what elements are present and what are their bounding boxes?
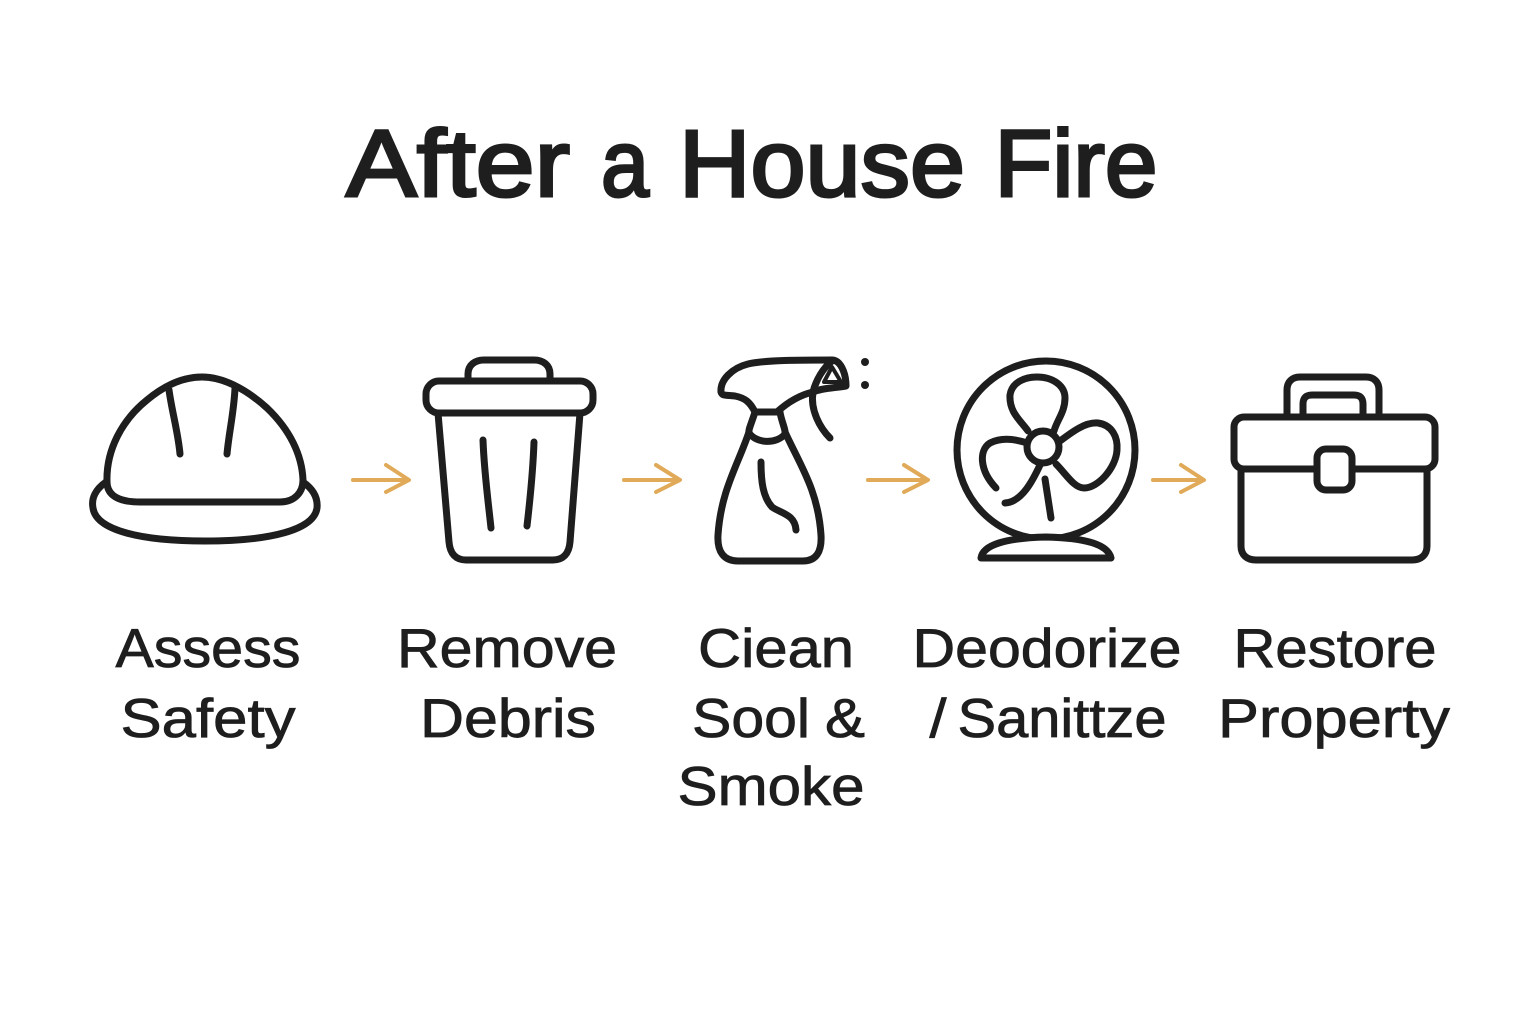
label: Restore Property bbox=[1218, 617, 1451, 749]
label: Clean Soot & Smoke: & bbox=[825, 687, 865, 749]
label: Clean Soot & Smoke: Ciean bbox=[698, 617, 854, 679]
icon: hard hat bbox=[93, 377, 317, 541]
arrow 3 bbox=[868, 465, 928, 492]
title: House bbox=[679, 111, 965, 217]
label: Assess Safety bbox=[116, 617, 300, 749]
label: Clean Soot & Smoke: Sool bbox=[692, 687, 810, 749]
label: Deodorize / Sanitize: Deodorize bbox=[912, 617, 1182, 679]
icon: trash can bbox=[426, 360, 593, 560]
label: Clean Soot & Smoke bbox=[678, 617, 865, 817]
icon: fan bbox=[957, 361, 1135, 558]
label: Assess Safety: Assess bbox=[116, 617, 300, 679]
arrow 4 bbox=[1153, 465, 1204, 492]
label: Deodorize / Sanitize: Sanittze bbox=[958, 687, 1166, 749]
label: Deodorize / Sanitize: / bbox=[930, 687, 947, 749]
icon: spray droplets bbox=[861, 358, 869, 389]
title: Fire bbox=[994, 111, 1158, 217]
label: Remove Debris bbox=[397, 617, 617, 749]
arrow 1 bbox=[353, 465, 409, 492]
label: Remove Debris: Remove bbox=[397, 617, 617, 679]
label: Restore Property: Restore bbox=[1234, 617, 1436, 679]
label: Assess Safety: Safety bbox=[120, 687, 296, 749]
icon: spray bottle bbox=[718, 360, 846, 561]
title: After bbox=[346, 111, 570, 217]
label: Restore Property: Property bbox=[1218, 687, 1451, 749]
label: Deodorize / Sanitize bbox=[912, 617, 1182, 749]
icon: toolbox bbox=[1234, 377, 1435, 560]
label: Clean Soot & Smoke: Smoke bbox=[678, 755, 864, 817]
title: a bbox=[601, 111, 649, 217]
arrow 2 bbox=[624, 465, 680, 492]
label: Remove Debris: Debris bbox=[420, 687, 596, 749]
title bbox=[346, 111, 1158, 217]
